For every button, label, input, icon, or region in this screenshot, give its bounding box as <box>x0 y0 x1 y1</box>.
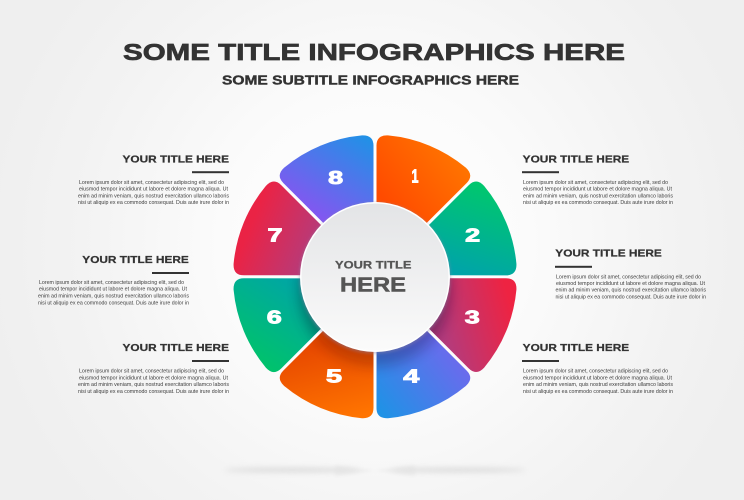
underline: bottom left <box>192 360 229 362</box>
body: top left: Lorem ipsum dolor sit amet, consectetur adipiscing elit, sed do <box>79 180 224 186</box>
subtitle: SOME SUBTITLE INFOGRAPHICS HERE <box>222 72 520 88</box>
title: SOME TITLE INFOGRAPHICS HERE <box>123 39 625 65</box>
text block: middle left <box>38 255 189 306</box>
segment 1 <box>376 135 470 226</box>
body: bottom right: Lorem ipsum dolor sit amet, consectetur adipiscing elit, sed do <box>523 369 668 375</box>
segment 4 <box>376 331 470 418</box>
segment 1: 1 <box>412 166 418 186</box>
body: bottom left: nisi ut aliquip ex ea commodo consequat. Duis aute irure dolor in <box>78 389 229 395</box>
body: middle left: nisi ut aliquip ex ea commodo consequat. Duis aute irure dolor in <box>38 300 189 306</box>
body: top right: eiusmod tempor incididunt ut labore et dolore magna aliqua. Ut <box>523 187 673 193</box>
body: middle right: enim ad minim veniam, quis nostrud exercitation ullamco laboris <box>556 288 706 294</box>
body: middle right <box>556 274 706 300</box>
underline: top right <box>522 171 559 173</box>
text block: top left <box>78 154 229 206</box>
body: bottom right: nisi ut aliquip ex ea commodo consequat. Duis aute irure dolor in <box>523 389 673 395</box>
underline: top left <box>192 171 229 173</box>
body: middle left: eiusmod tempor incididunt ut labore et dolore magna aliqua. Ut <box>39 287 188 293</box>
body: bottom left: eiusmod tempor incididunt ut labore et dolore magna aliqua. Ut <box>79 375 229 381</box>
segmented ring chart <box>234 135 516 418</box>
text block: bottom left <box>78 343 229 395</box>
body: middle right: Lorem ipsum dolor sit amet, consectetur adipiscing elit, sed do <box>556 274 701 280</box>
text block: bottom right <box>522 343 673 395</box>
body: middle right: eiusmod tempor incididunt ut labore et dolore magna aliqua. Ut <box>556 281 706 287</box>
body: bottom right: eiusmod tempor incididunt ut labore et dolore magna aliqua. Ut <box>523 375 673 381</box>
text block: middle right <box>555 248 706 300</box>
body: top left: nisi ut aliquip ex ea commodo consequat. Duis aute irure dolor in <box>78 200 229 206</box>
body: bottom left <box>78 369 229 395</box>
body: bottom left: enim ad minim veniam, quis nostrud exercitation ullamco laboris <box>78 382 229 388</box>
segment 2: 2 <box>465 225 480 246</box>
body: top right: Lorem ipsum dolor sit amet, consectetur adipiscing elit, sed do <box>523 180 668 186</box>
heading: bottom left: YOUR TITLE HERE <box>122 343 229 354</box>
heading: top right: YOUR TITLE HERE <box>523 154 630 166</box>
segment 4: 4 <box>403 366 420 387</box>
body: middle left <box>38 280 189 306</box>
segment 6: 6 <box>267 306 282 327</box>
segment 2 <box>412 178 542 308</box>
heading: top left: YOUR TITLE HERE <box>122 154 229 166</box>
underline: middle right <box>555 266 592 268</box>
body: middle left: Lorem ipsum dolor sit amet, consectetur adipiscing elit, sed do <box>39 280 184 286</box>
segment 3: 3 <box>465 306 480 327</box>
segment 3 <box>429 278 516 372</box>
underline: bottom right <box>522 360 559 362</box>
floor shadow <box>224 465 526 476</box>
heading: middle right: YOUR TITLE HERE <box>555 248 662 260</box>
segment 7 <box>234 182 324 275</box>
segment 7: 7 <box>268 225 282 246</box>
center label: here: HERE <box>340 275 406 297</box>
segment 5 <box>280 331 374 418</box>
heading: middle left: YOUR TITLE HERE <box>82 255 189 266</box>
segment 8 <box>276 109 407 240</box>
body: bottom left: Lorem ipsum dolor sit amet, consectetur adipiscing elit, sed do <box>79 369 224 375</box>
body: top left: eiusmod tempor incididunt ut labore et dolore magna aliqua. Ut <box>79 187 229 193</box>
body: bottom right: enim ad minim veniam, quis nostrud exercitation ullamco laboris <box>523 382 673 388</box>
body: middle right: nisi ut aliquip ex ea commodo consequat. Duis aute irure dolor in <box>556 294 706 300</box>
body: top right: nisi ut aliquip ex ea commodo consequat. Duis aute irure dolor in <box>523 200 673 206</box>
body: top right: enim ad minim veniam, quis nostrud exercitation ullamco laboris <box>523 194 673 200</box>
segment 5: 5 <box>326 366 342 387</box>
heading: bottom right: YOUR TITLE HERE <box>523 343 630 354</box>
segment 6 <box>234 278 321 372</box>
body: bottom right <box>523 369 673 395</box>
text block: top right <box>522 154 673 206</box>
body: top right <box>523 180 673 206</box>
body: top left <box>78 180 229 206</box>
center label: your title: YOUR TITLE <box>335 259 412 271</box>
underline: middle left <box>152 272 189 274</box>
body: middle left: enim ad minim veniam, quis nostrud exercitation ullamco laboris <box>38 293 189 299</box>
body: top left: enim ad minim veniam, quis nostrud exercitation ullamco laboris <box>78 194 229 200</box>
segment 8: 8 <box>328 167 343 188</box>
center circle <box>300 202 450 354</box>
